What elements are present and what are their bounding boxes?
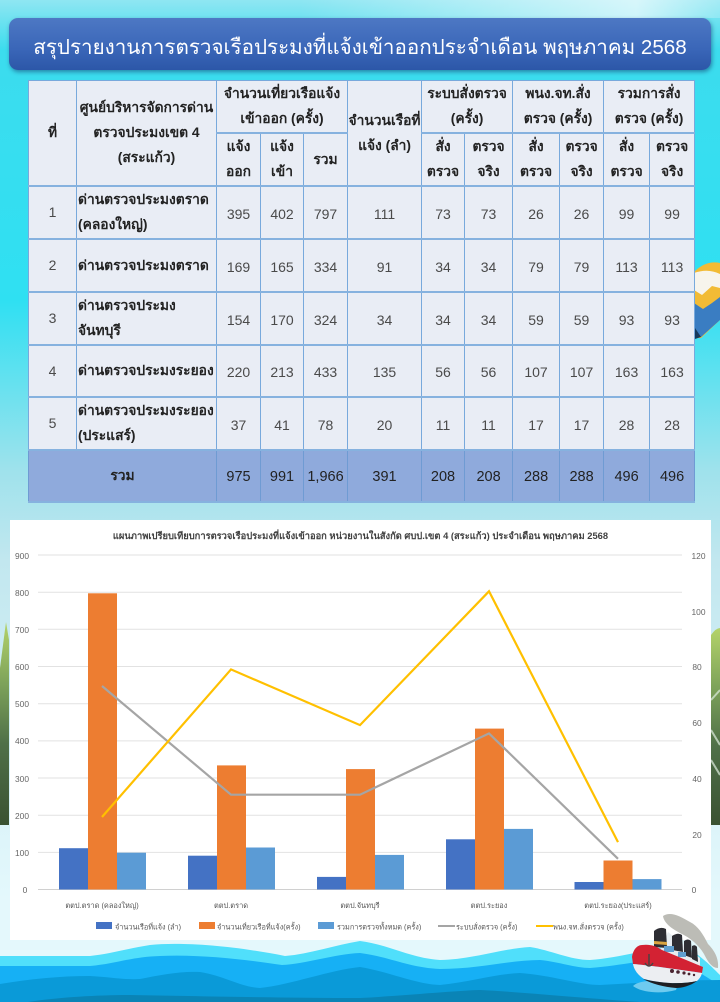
data table: ตรวจประมงเขต 4	[93, 125, 200, 140]
left axis: 800	[15, 588, 29, 598]
data table: 26	[574, 206, 589, 222]
category labels: ตตป.ระยอง	[471, 901, 508, 910]
data table: ตรวจ (ครั้ง)	[524, 111, 592, 126]
data table: 59	[528, 312, 544, 328]
data table: 78	[318, 416, 333, 432]
data table: สั่ง	[435, 139, 451, 154]
data table: 73	[435, 206, 451, 222]
data table: 34	[435, 312, 451, 328]
right axis: 100	[692, 607, 706, 617]
data table: 163	[615, 364, 638, 380]
data table: 1,966	[307, 469, 344, 485]
data table: 11	[436, 416, 450, 432]
data table: (ประแสร์)	[78, 428, 136, 443]
left axis: 100	[15, 848, 29, 858]
data table: 208	[476, 469, 501, 485]
data table: 288	[569, 469, 594, 485]
data table: ที่	[48, 125, 57, 140]
data table: 17	[528, 416, 544, 432]
data table: ตรวจ	[656, 139, 688, 154]
grid lines	[38, 555, 682, 890]
data table: 107	[524, 364, 548, 380]
data table: 56	[435, 364, 451, 380]
data table: 91	[377, 258, 392, 274]
line: system orders	[102, 686, 618, 859]
data table: 107	[570, 364, 593, 380]
left axis	[15, 551, 29, 895]
left axis: 200	[15, 811, 29, 821]
data table: 93	[664, 312, 680, 328]
data table: 59	[574, 312, 589, 328]
data table: ด่านตรวจประมงระยอง	[78, 403, 214, 418]
data table: 288	[524, 469, 548, 485]
icon: ship	[632, 914, 718, 992]
data table: 220	[227, 364, 250, 380]
data table: แจ้ง	[270, 139, 294, 154]
data table: ตรวจ	[610, 164, 643, 179]
title	[9, 18, 711, 70]
data table: 169	[227, 258, 250, 274]
legend: พนง.จท.สั่งตรวจ (ครั้ง)	[553, 922, 624, 932]
data table: 496	[660, 469, 684, 485]
data table: จำนวนเที่ยวเรือแจ้ง	[224, 86, 340, 101]
data table: เข้า	[271, 164, 293, 179]
data table: 34	[435, 258, 451, 274]
data table: (ครั้ง)	[451, 111, 483, 126]
data table: พนง.จท.สั่ง	[525, 86, 591, 101]
data table: 324	[314, 312, 337, 328]
category labels: ตตป.จันทบุรี	[340, 901, 380, 910]
data table: เข้าออก (ครั้ง)	[240, 111, 324, 126]
data table: 17	[574, 416, 589, 432]
data table: 991	[270, 469, 294, 485]
data table: จริง	[477, 164, 500, 179]
left palm	[0, 622, 9, 825]
category labels	[65, 901, 652, 910]
left axis: 0	[23, 885, 28, 895]
data table: รวม	[313, 152, 338, 166]
data table: 79	[528, 258, 544, 274]
title: สรุปรายงานการตรวจเรือประมงที่แจ้งเข้าออกประจำเดือน พฤษภาคม 2568	[33, 36, 687, 59]
left axis: 900	[15, 551, 29, 561]
chart panel	[10, 520, 711, 940]
data table: 37	[231, 416, 246, 432]
data table: 391	[372, 469, 397, 485]
data table: 113	[615, 258, 638, 274]
data table: 28	[619, 416, 634, 432]
category labels: ตตป.ตราด (คลองใหญ่)	[65, 901, 139, 910]
right axis	[692, 551, 706, 895]
legend: รวมการตรวจทั้งหมด (ครั้ง)	[337, 922, 421, 932]
legend: จำนวนเรือที่แจ้ง (ลำ)	[115, 922, 181, 932]
right axis: 120	[692, 551, 706, 561]
right axis: 0	[692, 885, 697, 895]
data table: รวมการสั่ง	[618, 86, 681, 101]
data table: 73	[481, 206, 496, 222]
data table: 213	[270, 364, 294, 380]
left axis: 500	[15, 699, 29, 709]
data table: ด่านตรวจประมงตราด	[78, 258, 209, 272]
legend: จำนวนเที่ยวเรือที่แจ้ง(ครั้ง)	[217, 922, 300, 932]
data table: 208	[431, 469, 455, 485]
data table: 34	[377, 312, 392, 328]
data table: 99	[619, 206, 634, 222]
data table: 111	[374, 206, 395, 222]
data table: จันทบุรี	[78, 323, 121, 338]
legend: ระบบสั่งตรวจ (ครั้ง)	[456, 922, 517, 932]
data table: 26	[528, 206, 544, 222]
left axis: 700	[15, 625, 29, 635]
data table: จำนวนเรือที่	[349, 113, 420, 128]
data table: 395	[227, 206, 250, 222]
right axis: 80	[692, 662, 702, 672]
data table: 41	[274, 416, 290, 432]
data table: 2	[49, 257, 56, 273]
data table: 334	[314, 258, 337, 274]
right axis: 60	[692, 718, 702, 728]
data table: 34	[481, 258, 496, 274]
data table: 163	[660, 364, 684, 380]
bars: total inspections	[117, 829, 662, 890]
data table: แจ้ง	[227, 139, 250, 154]
data table: 135	[373, 364, 396, 380]
legend	[96, 922, 624, 932]
data table: ตรวจ	[565, 139, 598, 154]
data table: 1	[49, 204, 56, 220]
data table: ตรวจ	[472, 139, 505, 154]
data table: 28	[664, 416, 680, 432]
data table: ด่านตรวจประมงตราด	[78, 192, 209, 207]
category labels: ตตป.ระยอง(ประแสร์)	[584, 901, 652, 910]
data table: 3	[49, 310, 56, 326]
left axis: 400	[15, 736, 29, 746]
right axis: 20	[692, 830, 702, 840]
data table: 5	[49, 415, 56, 431]
data table: 165	[270, 258, 294, 274]
bars: vessels	[59, 839, 604, 890]
data table: 154	[227, 312, 250, 328]
bars: trips	[88, 593, 632, 890]
left axis: 600	[15, 662, 29, 672]
data table: 93	[619, 312, 634, 328]
data table: 797	[314, 206, 337, 222]
data table: 99	[664, 206, 680, 222]
chart title: แผนภาพเปรียบเทียบการตรวจเรือประมงที่แจ้งเข้าออก หน่วยงานในสังกัด ศบป.เขต 4 (สระแก้ว) ประจำเดือน พฤษภาคม 2568	[113, 529, 608, 541]
data table: 975	[226, 469, 251, 485]
data table: 433	[314, 364, 337, 380]
data table: รวม	[110, 468, 135, 483]
data table: จริง	[661, 164, 683, 179]
data table: (คลองใหญ่)	[78, 217, 147, 232]
data table: สั่ง	[619, 139, 634, 154]
data table: 34	[481, 312, 496, 328]
right axis: 40	[692, 774, 702, 784]
line: officer orders	[102, 591, 618, 842]
data table: 11	[481, 416, 496, 432]
left axis: 300	[15, 774, 29, 784]
icon: hot air balloon	[694, 262, 720, 339]
data table: (สระแก้ว)	[118, 150, 175, 165]
data table: 496	[614, 469, 639, 485]
data table	[28, 80, 695, 502]
category labels: ตตป.ตราด	[214, 901, 248, 910]
data table: ออก	[226, 164, 251, 179]
data table: 170	[270, 312, 294, 328]
data table: 20	[377, 416, 392, 432]
data table: ด่านตรวจประมง	[78, 298, 176, 313]
data table: จริง	[570, 164, 593, 179]
data table: ศูนย์บริหารจัดการด่าน	[80, 100, 213, 115]
data table: ระบบสั่งตรวจ	[427, 86, 507, 101]
data table: ตรวจ	[520, 164, 552, 179]
data table: 113	[661, 258, 683, 274]
data table: ตรวจ	[427, 164, 459, 179]
data table: 79	[574, 258, 589, 274]
waves	[0, 941, 720, 1002]
data table: แจ้ง (ลำ)	[358, 138, 411, 153]
right palm	[711, 628, 720, 825]
data table: 56	[481, 364, 496, 380]
data table: สั่ง	[528, 139, 544, 154]
data table: 4	[49, 362, 56, 378]
data table: 402	[270, 206, 294, 222]
data table: ด่านตรวจประมงระยอง	[78, 363, 214, 378]
data table: ตรวจ (ครั้ง)	[615, 111, 683, 126]
